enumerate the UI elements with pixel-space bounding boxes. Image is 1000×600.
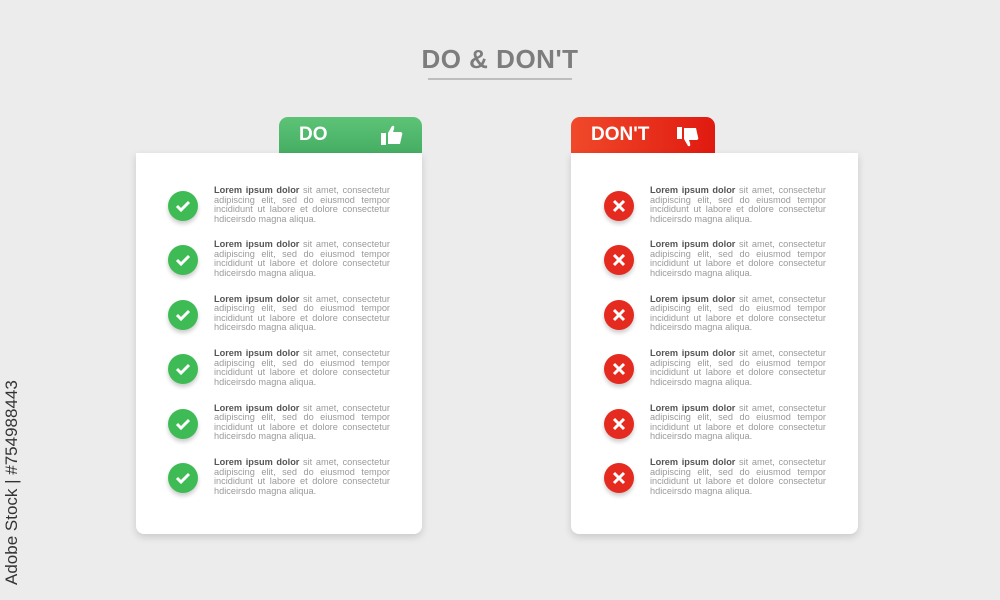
dont items: Lorem ipsum dolor sit amet, consectetur adipiscing elit, sed do eiusmod tempor incididunt ut labore et dolore consectetur hdiceirsdo magna aliqua. — [650, 294, 826, 332]
dont items — [602, 185, 826, 498]
dont items: Lorem ipsum dolor sit amet, consectetur adipiscing elit, sed do eiusmod tempor incididunt ut labore et dolore consectetur hdiceirsdo magna aliqua. — [650, 403, 826, 441]
dont items: Lorem ipsum dolor sit amet, consectetur adipiscing elit, sed do eiusmod tempor incididunt ut labore et dolore consectetur hdiceirsdo magna aliqua. — [650, 239, 826, 278]
icon: thumbs down — [677, 127, 698, 146]
do items: Lorem ipsum dolor sit amet, consectetur adipiscing elit, sed do eiusmod tempor incididunt ut labore et dolore consectetur hdiceirsdo magna aliqua. — [214, 348, 390, 387]
tab: do — [279, 117, 422, 155]
tab: dont: DON'T — [591, 124, 649, 145]
tab: dont — [571, 117, 715, 155]
panel: dont — [571, 153, 858, 534]
watermark text: Adobe Stock | #754988443 — [2, 380, 21, 585]
dont items: Lorem ipsum dolor sit amet, consectetur adipiscing elit, sed do eiusmod tempor incididunt ut labore et dolore consectetur hdiceirsdo magna aliqua. — [650, 185, 826, 224]
dont items: Lorem ipsum dolor sit amet, consectetur adipiscing elit, sed do eiusmod tempor incididunt ut labore et dolore consectetur hdiceirsdo magna aliqua. — [650, 457, 826, 496]
do items: Lorem ipsum dolor sit amet, consectetur adipiscing elit, sed do eiusmod tempor incididunt ut labore et dolore consectetur hdiceirsdo magna aliqua. — [214, 185, 390, 224]
icon: thumbs up — [381, 126, 402, 145]
panel: do — [136, 153, 422, 534]
do items: Lorem ipsum dolor sit amet, consectetur adipiscing elit, sed do eiusmod tempor incididunt ut labore et dolore consectetur hdiceirsdo magna aliqua. — [214, 239, 390, 278]
do items: Lorem ipsum dolor sit amet, consectetur adipiscing elit, sed do eiusmod tempor incididunt ut labore et dolore consectetur hdiceirsdo magna aliqua. — [214, 457, 390, 496]
do items: Lorem ipsum dolor sit amet, consectetur adipiscing elit, sed do eiusmod tempor incididunt ut labore et dolore consectetur hdiceirsdo magna aliqua. — [214, 294, 390, 332]
do items: Lorem ipsum dolor sit amet, consectetur adipiscing elit, sed do eiusmod tempor incididunt ut labore et dolore consectetur hdiceirsdo magna aliqua. — [214, 403, 390, 441]
dont items: Lorem ipsum dolor sit amet, consectetur adipiscing elit, sed do eiusmod tempor incididunt ut labore et dolore consectetur hdiceirsdo magna aliqua. — [650, 348, 826, 387]
tab: do: DO — [299, 124, 328, 145]
title: DO & DON'T — [421, 44, 579, 74]
do items — [166, 185, 390, 498]
